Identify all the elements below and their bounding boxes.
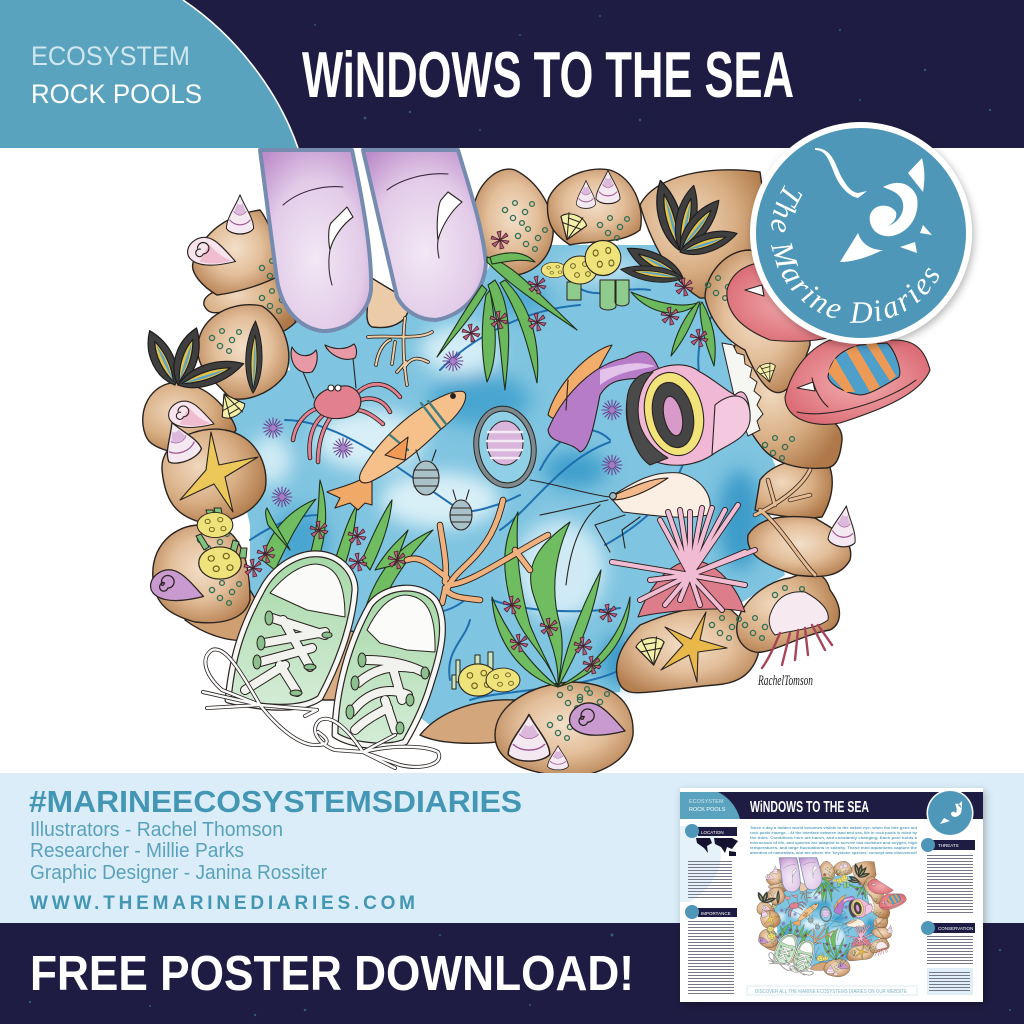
rock: right middle (732, 344, 842, 468)
poster location section (680, 824, 738, 902)
poster intro: temperatures, and large fluctuations in salinity. These mini aquariums capture the (750, 845, 918, 850)
poster importance section: IMPORTANCE (701, 911, 731, 916)
tab edge (183, 0, 298, 148)
poster thumbnail (680, 788, 983, 1002)
rock: right upper (755, 459, 832, 518)
poster website box: DISCOVER ALL THE MARINE ECOSYSTEMS DIARIES ON OUR WEBSITE (755, 989, 908, 995)
rock: top left lower (204, 270, 296, 332)
sea anemone (612, 505, 755, 617)
shrimp (530, 473, 710, 585)
urchins and anemones (244, 231, 708, 674)
download heading: FREE POSTER DOWNLOAD! (30, 947, 634, 1001)
small shell on right rock (755, 362, 779, 385)
rock: top right (705, 250, 810, 393)
rock: starfish left (162, 429, 266, 523)
rock: flip flop gap (367, 277, 409, 328)
left grass seaweed (262, 480, 433, 630)
poster conservation section (921, 921, 975, 995)
branching coral centre (407, 500, 548, 603)
rock: top one (473, 169, 553, 275)
poster sheet (680, 788, 983, 1002)
coral under flip flop (368, 318, 432, 385)
mussels left (139, 321, 263, 394)
poster threats section (921, 838, 975, 915)
rock: bottom shells (495, 682, 633, 777)
woodlice (413, 450, 472, 530)
rock: starfish right (617, 605, 758, 693)
teal ecosystem tab (0, 0, 298, 148)
fish (327, 391, 466, 510)
large snail shell (626, 365, 750, 465)
red flip flop lower (785, 340, 930, 424)
rocks (143, 169, 851, 777)
right seaweed (631, 292, 715, 366)
poster illustration (756, 858, 906, 977)
limpet (469, 402, 541, 492)
title: WiNDOWS TO THE SEA (302, 38, 794, 111)
poster conservation section: CONSERVATION (938, 926, 973, 931)
purple flip flops (260, 150, 486, 331)
illustrators credit: Illustrators - Rachel Thomson (30, 819, 283, 841)
signature: RachelTomson (757, 673, 813, 689)
left sneaker (228, 554, 355, 707)
website: WWW.THEMARINEDIARIES.COM (30, 893, 415, 914)
download background (0, 923, 1024, 1024)
credits background (0, 773, 1024, 923)
top banner (0, 0, 1024, 148)
rock: bottom sand (420, 700, 515, 743)
hermit crab (762, 592, 832, 668)
poster threats section: THREATS (938, 843, 959, 848)
poster rock pools label: ROCK POOLS (689, 807, 726, 813)
poster intro: rock pools emerge... At the interface between land and sea, life in rock pools is ruled by (750, 830, 918, 835)
right purple flip flop (363, 150, 486, 320)
shoelace bows (203, 649, 439, 768)
starfish left (180, 432, 258, 512)
poster intro: Twice a day a hidden world becomes visible to the naked eye: when the tide goes out (750, 825, 918, 830)
credits band (0, 773, 1024, 923)
rock: bottom left (153, 525, 250, 623)
banner background (0, 0, 1024, 148)
poster importance section (685, 905, 737, 996)
ecosystem label: ECOSYSTEM (31, 41, 190, 71)
shells on rocks (151, 170, 860, 770)
rock: between shoes (318, 630, 380, 700)
water (222, 245, 785, 725)
rock: hermit crab (737, 573, 839, 652)
hashtag: #MARINEECOSYSTEMSDIARIES (29, 784, 522, 819)
poster title: WiNDOWS TO THE SEA (750, 799, 869, 816)
right sneaker (335, 588, 442, 746)
mussels top right (620, 178, 740, 287)
rock pools label: ROCK POOLS (31, 79, 202, 109)
download speckles (29, 934, 1011, 1016)
rock: top three (640, 170, 770, 298)
logo badge (748, 122, 978, 351)
starfish right (661, 612, 727, 682)
orange creature (548, 345, 660, 452)
small coral right (755, 470, 815, 575)
poster header (680, 792, 983, 819)
crab (291, 344, 400, 462)
stingray icon (815, 148, 932, 262)
poster location section: LOCATION (701, 830, 724, 835)
poster intro (750, 825, 918, 855)
bottom seaweed (492, 512, 630, 687)
poster teal tab (680, 792, 740, 819)
rock spots (197, 201, 804, 740)
shoelace bow fill (203, 649, 439, 768)
rock: top left upper (193, 210, 278, 295)
download band (0, 923, 1024, 1024)
researcher credit: Researcher - Millie Parks (30, 840, 244, 862)
left purple flip flop (260, 150, 371, 331)
barnacles (196, 240, 629, 696)
badge disc (750, 122, 972, 344)
poster ecosystem label: ECOSYSTEM (689, 799, 724, 805)
rock: bottom left base (185, 590, 262, 640)
red flip flop upper (727, 262, 860, 341)
brand name on arc: The Marine Diaries (770, 185, 939, 323)
rock: left base (143, 382, 236, 452)
rock: mussel (198, 305, 289, 399)
illustration: rock pool (139, 150, 930, 777)
poster intro: the tides. Conditions here are harsh, and constantly changing. Each pool holds a (750, 835, 918, 840)
water shading (248, 258, 762, 685)
poster intro: microcosm of life, and species are adapted to survive low moisture and oxygen, high (750, 840, 918, 845)
top seaweed (437, 253, 577, 390)
banner speckles (314, 15, 991, 131)
rock: right shell (748, 517, 851, 576)
poster logo (926, 790, 974, 836)
rock: top two (547, 169, 641, 245)
scalloped white shell (722, 343, 763, 436)
designer credit: Graphic Designer - Janina Rossiter (30, 862, 327, 884)
poster intro: attention of naturalists, and are where the 'keystone species' concept was discovered! (750, 850, 917, 855)
water current lines (250, 270, 720, 700)
poster website box (747, 986, 917, 995)
